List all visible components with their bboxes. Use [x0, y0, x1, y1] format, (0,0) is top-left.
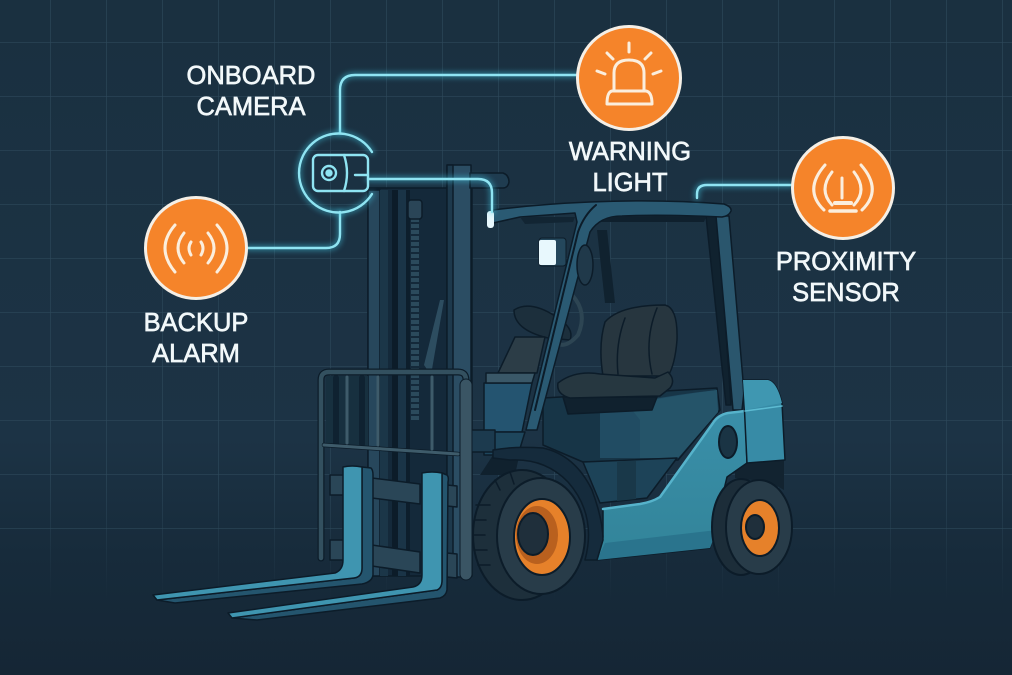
label: proximity sensor: SENSOR [792, 279, 900, 307]
label: onboard camera: CAMERA [196, 93, 306, 121]
icon: onboard camera [299, 134, 372, 212]
label: backup alarm: ALARM [152, 340, 240, 368]
label: warning light: WARNING [569, 138, 691, 166]
label: backup alarm: BACKUP [144, 309, 248, 337]
fork right [228, 472, 448, 620]
carriage bars [330, 475, 457, 578]
label: proximity sensor [776, 248, 916, 307]
cab frame [493, 201, 744, 430]
mudguard [493, 447, 603, 560]
load backrest [321, 372, 466, 574]
icon: warning light [578, 26, 680, 130]
body lower panel [583, 458, 677, 503]
connector lines [247, 75, 792, 248]
teal side panel [597, 411, 747, 560]
rear wheel [712, 479, 792, 575]
mast [368, 165, 509, 577]
body hood [543, 388, 720, 462]
icon: proximity sensor [792, 138, 894, 238]
dash and front cowl [465, 383, 532, 475]
icon: backup alarm [146, 198, 246, 298]
steering wheel and dash [486, 295, 582, 383]
label: warning light [569, 138, 691, 197]
label: onboard camera: ONBOARD [187, 62, 315, 90]
label: proximity sensor: PROXIMITY [776, 248, 916, 276]
label: warning light: LIGHT [592, 169, 668, 197]
fork left [153, 466, 373, 603]
rear teal panel [743, 380, 785, 463]
forklift [153, 165, 792, 620]
side mirror and lights [539, 238, 566, 266]
operator seat [558, 305, 677, 414]
label: onboard camera [187, 62, 315, 121]
label: backup alarm [144, 309, 248, 368]
rear lower dark [735, 460, 784, 490]
front wheel [473, 470, 585, 600]
